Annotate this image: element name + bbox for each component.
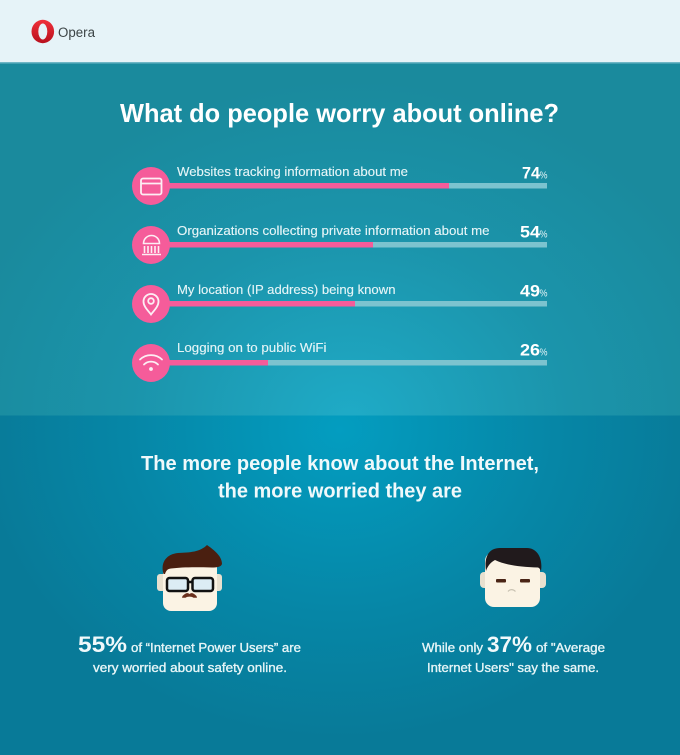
icon: browser window — [141, 178, 162, 194]
bar row: organizations collecting: 54 — [520, 222, 541, 242]
bar row: public wifi: 26 — [520, 340, 540, 360]
callout: power users: of “Internet Power Users” are — [131, 640, 301, 655]
callout: average users: 37% — [487, 632, 532, 657]
icon: power user face — [157, 545, 222, 611]
bar row: public wifi: Logging on to public WiFi — [177, 340, 327, 355]
bar row: websites tracking: Websites tracking information about me — [177, 164, 408, 179]
bar row: organizations collecting: Organizations collecting private information about me — [177, 223, 490, 238]
callout: power users — [78, 632, 301, 675]
callout: average users: Internet Users" say the same. — [427, 660, 599, 675]
bar row: organizations collecting: % — [540, 230, 548, 240]
heading: knowledge: the more worried they are — [218, 480, 462, 502]
icon: institution building — [142, 236, 161, 254]
bar row: location known: % — [540, 288, 548, 300]
bar row: location known: 49 — [520, 282, 540, 300]
Opera logo: Opera — [58, 25, 95, 40]
header band — [0, 0, 680, 64]
heading: knowledge — [141, 453, 539, 502]
callout: power users: 55% — [78, 632, 127, 657]
icon: location pin — [144, 294, 158, 314]
bar row: location known — [132, 282, 548, 323]
bar row: websites tracking: % — [540, 170, 548, 182]
bar row: websites tracking — [132, 164, 548, 205]
callout: average users: While only — [422, 640, 484, 655]
bar row: public wifi: % — [540, 348, 548, 358]
panel: worries background — [0, 64, 680, 416]
icon: wifi — [140, 355, 162, 370]
callout: average users: of "Average — [536, 640, 605, 655]
callout: average users — [422, 632, 605, 675]
bar row: public wifi — [132, 340, 548, 382]
Opera logo — [31, 20, 95, 43]
callout: power users: very worried about safety online. — [93, 660, 287, 675]
heading: knowledge: The more people know about the Internet, — [141, 453, 539, 475]
title: What do people worry about online? — [120, 98, 559, 128]
icon: average user face — [480, 548, 546, 607]
bar row: websites tracking: 74 — [522, 164, 541, 182]
bar row: organizations collecting — [132, 222, 548, 264]
bar row: location known: My location (IP address) being known — [177, 282, 396, 297]
panel: knowledge background — [0, 416, 680, 755]
